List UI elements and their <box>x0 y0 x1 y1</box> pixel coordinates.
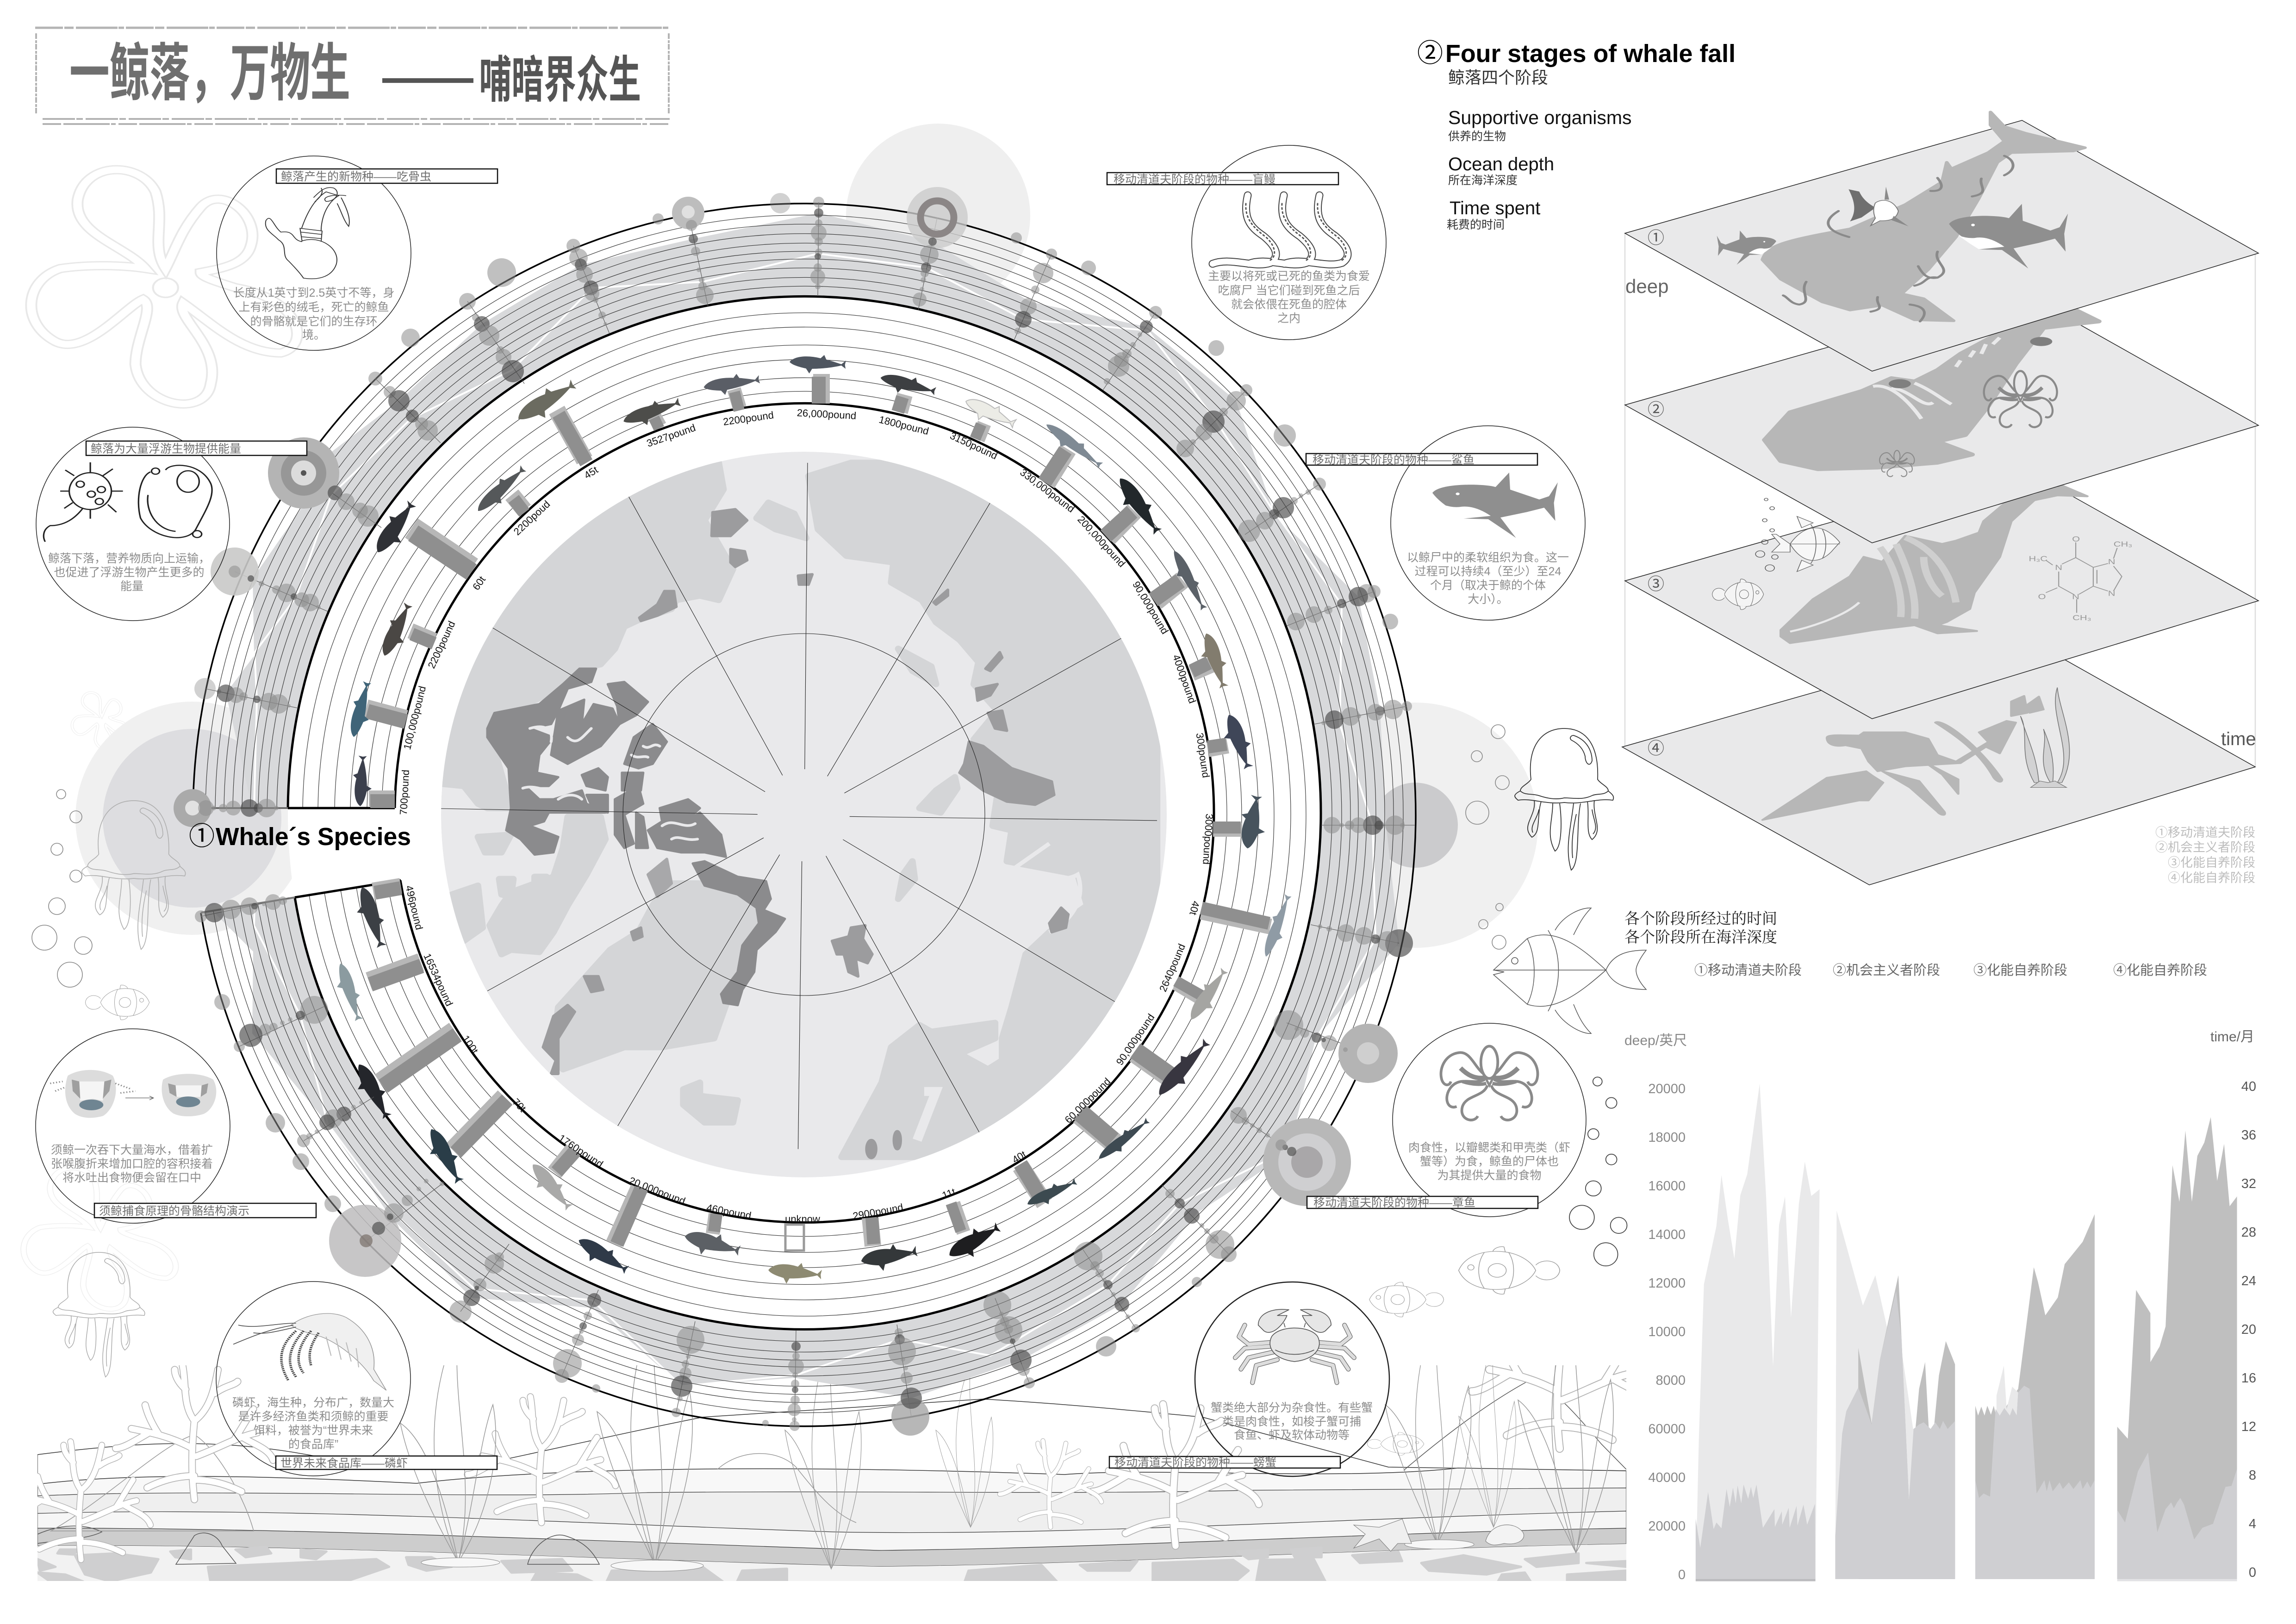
weight labels: 3000pound <box>1201 813 1215 865</box>
callout: shark <box>1306 426 1585 620</box>
section title: Four stages of whale fall <box>1445 40 1736 68</box>
bubbles left <box>32 790 92 987</box>
bar 40t lower <box>1020 1164 1045 1203</box>
callout: bone worm <box>217 156 498 350</box>
label box: 鲸落产生的新物种——吃骨虫 <box>281 170 431 183</box>
icon: shark <box>1432 473 1558 538</box>
spoke 9 target <box>907 187 968 306</box>
shark big <box>1949 204 2068 268</box>
body text: 上有彩色的绒毛，死亡的鲸鱼 <box>238 301 389 314</box>
sea channels <box>917 844 1080 1140</box>
plane 3: whale carcass: N <box>2108 590 2116 598</box>
bead spokes <box>174 187 1413 1436</box>
shark front view <box>1848 187 1909 226</box>
spoke 21 <box>1074 1242 1140 1356</box>
weight labels: 100t <box>460 1033 480 1056</box>
title frame and heading <box>35 22 670 124</box>
weight labels: 90,000pound <box>1130 579 1171 636</box>
body text: 为其提供大量的食物 <box>1437 1169 1542 1182</box>
depth axis: 18000 <box>1648 1130 1686 1145</box>
icon: octopus <box>1441 1046 1538 1120</box>
chart heading <box>1624 907 1777 947</box>
decomposing whale <box>1765 310 2099 469</box>
spoke 20 <box>1165 1189 1237 1287</box>
plane 3: whale carcass: N <box>2108 558 2116 566</box>
plane 3: whale carcass: O <box>2038 593 2046 601</box>
weight labels: 11t <box>940 1186 957 1201</box>
stage legend <box>2155 826 2255 885</box>
octopus large <box>1984 371 2057 427</box>
Arctic map <box>417 452 1167 1177</box>
bar 2640pound <box>1176 981 1201 999</box>
stage 3 number: ③ <box>1648 571 1664 595</box>
body text: 磷虾，海生种，分布广，数量大 <box>232 1396 394 1409</box>
chart legend: ②机会主义者阶段 <box>1833 963 1940 978</box>
bar 330,000pound <box>1045 449 1068 484</box>
depth axis: 20000 <box>1648 1082 1686 1096</box>
bar 2900pound <box>870 1218 874 1246</box>
deep axis label: deep <box>1625 275 1668 297</box>
icon: crab <box>1235 1309 1354 1383</box>
time axis: 4 <box>2249 1517 2256 1531</box>
legend: supportive organisms <box>1448 107 1632 143</box>
bar 3527pound <box>653 415 660 429</box>
spoke 15 <box>1321 700 1412 729</box>
depth axis: 10000 <box>1648 1325 1686 1339</box>
weight labels: 45t <box>582 464 600 481</box>
icon: bone worm <box>266 187 349 279</box>
bar 700pound <box>369 798 395 801</box>
bar 20,000pound <box>614 1188 641 1244</box>
bar 200,000pound <box>1106 511 1134 538</box>
carcass <box>1781 485 2087 643</box>
weight labels: 3527pound <box>645 422 697 449</box>
spoke 27 <box>449 1252 504 1323</box>
clownfish group right <box>1367 1247 1560 1456</box>
body text <box>1408 1141 1570 1182</box>
weight labels: 70t <box>510 1096 529 1114</box>
time axis: 12 <box>2241 1419 2256 1434</box>
bar 3000pound <box>1213 828 1242 830</box>
weight labels: 2640pound <box>1157 942 1188 994</box>
legend: supportive organisms: 供养的生物 <box>1448 130 1506 143</box>
chart stage 4 <box>2117 1117 2237 1581</box>
clownfish left <box>85 985 149 1020</box>
weight labels: 1760pound <box>556 1132 605 1170</box>
stacked isometric stages <box>1622 112 2259 885</box>
skeleton <box>1762 696 2043 820</box>
time axis label: time <box>2221 729 2256 749</box>
body text <box>1407 551 1569 606</box>
section 2 heading <box>1417 32 1736 87</box>
label box <box>1107 173 1338 186</box>
body text: 就会依偎在死鱼的腔体 <box>1231 298 1347 311</box>
body text <box>233 286 394 342</box>
legend: ocean depth: Ocean depth <box>1448 154 1554 174</box>
label box <box>276 169 498 183</box>
bar 3150pound <box>975 423 984 440</box>
time axis: 0 <box>2249 1565 2256 1580</box>
heading text: Whale´s Species <box>216 823 411 851</box>
bar 60,000pound <box>1080 1112 1114 1143</box>
section number: ② <box>1417 32 1443 70</box>
section subtitle: 鲸落四个阶段 <box>1448 68 1548 87</box>
body text: 张喉腹折来增加口腔的容积接着 <box>51 1157 213 1170</box>
chart heading: 各个阶段所经过的时间 <box>1624 907 1777 928</box>
body text: 境。 <box>302 329 325 342</box>
body text: 是许多经济鱼类和须鲸的重要 <box>238 1410 389 1423</box>
label box: 移动清道夫阶段的物种——鲨鱼 <box>1313 454 1475 467</box>
weight labels: 2200pound <box>425 619 458 670</box>
body text: 蟹类绝大部分为杂食性。有些蟹 <box>1211 1401 1373 1414</box>
label box: 须鲸捕食原理的骨骼结构演示 <box>99 1205 249 1218</box>
bar 90,000pound lower <box>1135 1051 1173 1080</box>
body text: 过程可以持续4（至少）至24 <box>1415 565 1561 578</box>
spoke 4 <box>368 329 438 441</box>
depth axis: deep/英尺 <box>1624 1033 1687 1048</box>
legend: ocean depth <box>1448 154 1554 187</box>
spoke 1 <box>194 678 291 714</box>
body text: 饵料，被誉为“世界未来 <box>254 1424 373 1437</box>
body text: 个月（取决于鲸的个体 <box>1430 579 1546 592</box>
icon: plankton <box>44 462 212 542</box>
body text: 能量 <box>120 580 143 593</box>
spoke 18 target <box>1274 1010 1398 1083</box>
angelfish large <box>1493 908 1646 1033</box>
weight labels: 60,000pound <box>1063 1076 1113 1126</box>
spoke 22 <box>983 1291 1035 1388</box>
time axis: 28 <box>2241 1225 2256 1240</box>
chart heading: 各个阶段所在海洋深度 <box>1624 925 1777 947</box>
depth axis: 40000 <box>1648 1470 1686 1485</box>
meridian lines <box>441 463 1157 1149</box>
shark small <box>1717 230 1776 265</box>
time axis <box>2210 1029 2256 1580</box>
bar 16534pound <box>369 962 422 984</box>
chart stage 2 <box>1835 1211 1955 1579</box>
spoke 3 target <box>268 437 379 527</box>
bar 496pound <box>373 886 401 893</box>
bar 300pound <box>1208 744 1228 750</box>
label box: 移动清道夫阶段的物种——螃蟹 <box>1114 1456 1276 1469</box>
depth axis: 0 <box>1678 1568 1686 1582</box>
spoke 12 <box>1176 340 1252 457</box>
worms <box>1783 156 2013 321</box>
bar 4000pound <box>1192 663 1211 673</box>
weight labels: 460pound <box>706 1202 752 1221</box>
plane 3: whale carcass: N <box>2055 564 2062 572</box>
weight labels <box>398 407 1215 1225</box>
time axis: time/月 <box>2210 1029 2254 1045</box>
caffeine molecule <box>2046 542 2122 613</box>
stage legend: ②机会主义者阶段 <box>2155 840 2255 854</box>
dark islands <box>543 509 1068 1158</box>
chart legend: ④化能自养阶段 <box>2113 963 2207 978</box>
spoke 26 <box>553 1293 601 1383</box>
spoke 7 <box>653 193 790 304</box>
weight labels: 40t <box>1187 900 1202 916</box>
weight labels: 700pound <box>398 769 411 815</box>
body text: 主要以将死或已死的鱼类为食爱 <box>1208 270 1370 283</box>
whole whale <box>1762 112 2085 321</box>
spoke 24 <box>762 1342 804 1431</box>
plane 3: whale carcass: H₃C <box>2029 555 2047 563</box>
spoke 17 <box>1318 924 1413 957</box>
area chart: time and depth per stage <box>1696 1084 2237 1581</box>
icon: hagfish <box>1213 195 1348 264</box>
seabed illustration <box>37 1365 1626 1581</box>
title main: 一鲸落，万物生 <box>69 22 350 113</box>
body text: 类是肉食性，如梭子蟹可捕 <box>1222 1415 1361 1428</box>
body text: 蟹等）为食，鲸鱼的尸体也 <box>1420 1155 1559 1168</box>
body text: 大小）。 <box>1468 593 1508 606</box>
stage legend: ①移动清道夫阶段 <box>2155 826 2255 840</box>
legend: supportive organisms: Supportive organisms <box>1448 107 1632 128</box>
label box: 移动清道夫阶段的物种——盲鳗 <box>1114 173 1276 186</box>
darkest islands <box>487 669 785 1005</box>
flower outline top left <box>31 170 297 404</box>
depth axis: 12000 <box>1648 1276 1686 1291</box>
bubbles middle right <box>1466 725 1509 949</box>
bar 11t <box>951 1203 964 1232</box>
plane 3: whale carcass <box>1625 468 2259 719</box>
icon: baleen diagram <box>50 1070 216 1118</box>
callout: hagfish <box>1107 145 1386 340</box>
spoke 30 <box>214 994 328 1052</box>
chart legend: ①移动清道夫阶段 <box>1694 963 1802 978</box>
spoke 19 target <box>1230 1107 1351 1206</box>
stage legend: ③化能自养阶段 <box>2168 856 2255 870</box>
weight labels: 20,000pound <box>628 1175 687 1207</box>
body text: 肉食性，以瓣鳃类和甲壳类（虾 <box>1408 1141 1570 1154</box>
weight labels: 300pound <box>1194 732 1212 778</box>
stage legend: ④化能自养阶段 <box>2168 871 2255 885</box>
depth axis: 14000 <box>1648 1227 1686 1242</box>
jellyfish right <box>1515 728 1613 870</box>
weight labels: 4000pound <box>1170 653 1198 705</box>
bar 1800pound <box>898 395 905 412</box>
whale species silhouettes <box>330 353 1297 1287</box>
bar 45t <box>557 410 586 463</box>
label box <box>276 1456 497 1470</box>
icon: krill <box>233 1313 386 1390</box>
callout: crab <box>1109 1282 1389 1476</box>
bar 40t <box>1201 908 1270 927</box>
callout: baleen feeding <box>36 1029 316 1223</box>
label box: 世界未来食品库——磷虾 <box>280 1457 408 1470</box>
bar 100t <box>380 1031 457 1086</box>
spoke 2 <box>211 548 321 611</box>
bar 26,000pound <box>819 374 821 404</box>
bar 2200pound top <box>734 389 740 411</box>
weight labels: 496pound <box>403 884 425 931</box>
weight labels: 2900pound <box>852 1201 904 1222</box>
spoke 16 <box>1324 815 1405 835</box>
bar 70t <box>453 1097 507 1152</box>
depth axis: 16000 <box>1648 1179 1686 1194</box>
depth axis <box>1624 1033 1687 1582</box>
jellyfish left, faint <box>82 801 186 949</box>
spoke 31 <box>195 894 287 922</box>
background: flower outlines <box>24 170 297 1309</box>
weight labels: 3150pound <box>948 429 999 462</box>
radar polygon: gray whale-fall band <box>214 213 1399 1398</box>
chart stage 1 <box>1696 1084 1820 1581</box>
spoke 11 <box>1104 306 1162 385</box>
spoke lines <box>193 202 1415 1426</box>
angelfish <box>1772 516 1840 572</box>
label box <box>86 441 307 455</box>
heading number: ① <box>189 815 215 853</box>
weight labels: 2200pound <box>722 409 774 428</box>
archipelago channels <box>523 727 697 840</box>
spoke 25 <box>592 1326 704 1417</box>
spoke 28 <box>292 1153 444 1277</box>
plane 1: scavengers <box>1625 112 2259 371</box>
weight labels: 60t <box>470 574 488 592</box>
bar 1760pound <box>554 1150 575 1173</box>
weight labels: unknow <box>785 1213 820 1225</box>
body text <box>1211 1401 1373 1442</box>
bar 2200pound <box>411 631 434 643</box>
plane 3: whale carcass: O <box>2072 535 2080 543</box>
body text: 之内 <box>1277 312 1300 325</box>
depth axis: 20000 <box>1648 1519 1686 1534</box>
spoke 6 <box>566 239 607 326</box>
concentric rings <box>193 204 1416 1426</box>
time axis: 16 <box>2241 1371 2256 1386</box>
spoke 29 <box>266 1101 363 1147</box>
time axis: 32 <box>2241 1176 2256 1191</box>
arctic circle <box>623 634 985 996</box>
weight labels: 26,000pound <box>796 407 857 422</box>
fish near plane 3 <box>1712 498 1840 610</box>
body text: 须鲸一次吞下大量海水，借着扩 <box>51 1144 213 1157</box>
chart legend: ③化能自养阶段 <box>1973 963 2067 978</box>
depth axis: 8000 <box>1655 1373 1686 1388</box>
body text <box>232 1396 394 1451</box>
plane 3: whale carcass: CH₃ <box>2072 614 2091 622</box>
heading: whale species <box>189 815 411 853</box>
time axis: 36 <box>2241 1128 2256 1143</box>
callout: krill <box>216 1282 497 1476</box>
body text: 长度从1英寸到2.5英寸不等，身 <box>233 286 394 299</box>
flower outline small <box>72 692 131 749</box>
plane 3: whale carcass: CH₃ <box>2114 541 2132 548</box>
bar 60t <box>411 528 472 572</box>
body text: 也促进了浮游生物产生更多的 <box>54 566 205 579</box>
body text <box>48 552 210 593</box>
weight labels: 200,000pound <box>1075 514 1128 569</box>
bar 460pound <box>713 1214 716 1234</box>
title sub: 哺暗界众生 <box>479 40 641 112</box>
time axis: 24 <box>2241 1274 2256 1288</box>
body text: 将水吐出食物便会留在口中 <box>62 1171 201 1184</box>
bubbles <box>1755 498 1778 571</box>
jellyfish bottom left <box>53 1252 145 1377</box>
legend: time spent: 耗费的时间 <box>1447 218 1505 231</box>
flower outline bottom left <box>24 1168 176 1309</box>
label gap wedge <box>288 809 401 897</box>
bar 2200poud <box>512 495 524 513</box>
clownfish <box>1712 579 1764 610</box>
weight labels: 16534pound <box>421 952 455 1008</box>
callout: plankton <box>36 427 307 621</box>
label box: 移动清道夫阶段的物种——章鱼 <box>1313 1196 1475 1209</box>
weight bars <box>366 374 1270 1251</box>
body text: 吃腐尸 当它们碰到死鱼之后 <box>1218 284 1360 297</box>
chart stage 3 <box>1975 1214 2095 1579</box>
legend: time spent <box>1447 198 1540 231</box>
spoke 13 <box>1238 424 1326 542</box>
crabs <box>1889 337 2052 388</box>
spoke 5 <box>459 258 524 382</box>
legend: ocean depth: 所在海洋深度 <box>1448 174 1518 187</box>
second radar line in white <box>254 254 1375 1386</box>
title dash: —— <box>380 37 476 110</box>
plane 4: skeleton <box>1622 634 2255 885</box>
spoke 10 <box>1011 232 1096 334</box>
stage 1 number: ① <box>1648 224 1664 249</box>
body text: 的食品库” <box>288 1438 338 1451</box>
body text: 以鲸尸中的柔软组织为食。这一 <box>1407 551 1569 564</box>
body text: 的骨骼就是它们的生存环 <box>250 315 378 328</box>
weight labels: 90,000pound <box>1114 1012 1157 1067</box>
inner white disk <box>288 298 1321 1331</box>
spoke 14 <box>1287 584 1398 630</box>
time axis: 40 <box>2241 1079 2256 1094</box>
seaweed <box>2021 687 2070 788</box>
stage 2 number: ② <box>1648 396 1664 420</box>
body text: 鲸落下落，营养物质向上运输， <box>48 552 210 565</box>
depth axis: 60000 <box>1648 1422 1686 1437</box>
time axis: 20 <box>2241 1322 2256 1337</box>
vertical guides <box>1625 233 2255 767</box>
weight labels: 40t <box>1010 1148 1028 1166</box>
body text <box>1208 270 1370 325</box>
spoke 23 <box>888 1328 929 1436</box>
stage 4 number: ④ <box>1648 735 1664 759</box>
spoke 0 left target <box>174 789 279 827</box>
bar unknow outline <box>785 1225 804 1251</box>
bar 90,000pound right <box>1153 580 1182 602</box>
large background circles <box>75 124 1538 948</box>
body text <box>51 1144 213 1184</box>
callout: octopus <box>1307 1023 1586 1217</box>
weight labels: 1800pound <box>878 414 930 437</box>
legend: time spent: Time spent <box>1450 198 1540 218</box>
weight labels: 2200poud <box>511 498 552 538</box>
spoke 8 <box>810 197 827 289</box>
time axis: 8 <box>2249 1468 2256 1483</box>
octopus small <box>1879 450 1914 477</box>
label box: 鲸落为大量浮游生物提供能量 <box>91 442 241 455</box>
bubbles right <box>1569 1077 1627 1266</box>
body text: 食鱼、虾及软体动物等 <box>1234 1429 1350 1442</box>
chart legend <box>1694 963 2207 978</box>
land areas <box>417 463 1157 1157</box>
plane 2: opportunists <box>1625 292 2259 543</box>
bar 100,000pound <box>366 708 406 722</box>
label box <box>94 1203 316 1218</box>
weight labels: 330,000pound <box>1018 467 1077 515</box>
plane 3: whale carcass: N <box>2072 593 2079 601</box>
weight labels: 100,000pound <box>401 685 428 751</box>
